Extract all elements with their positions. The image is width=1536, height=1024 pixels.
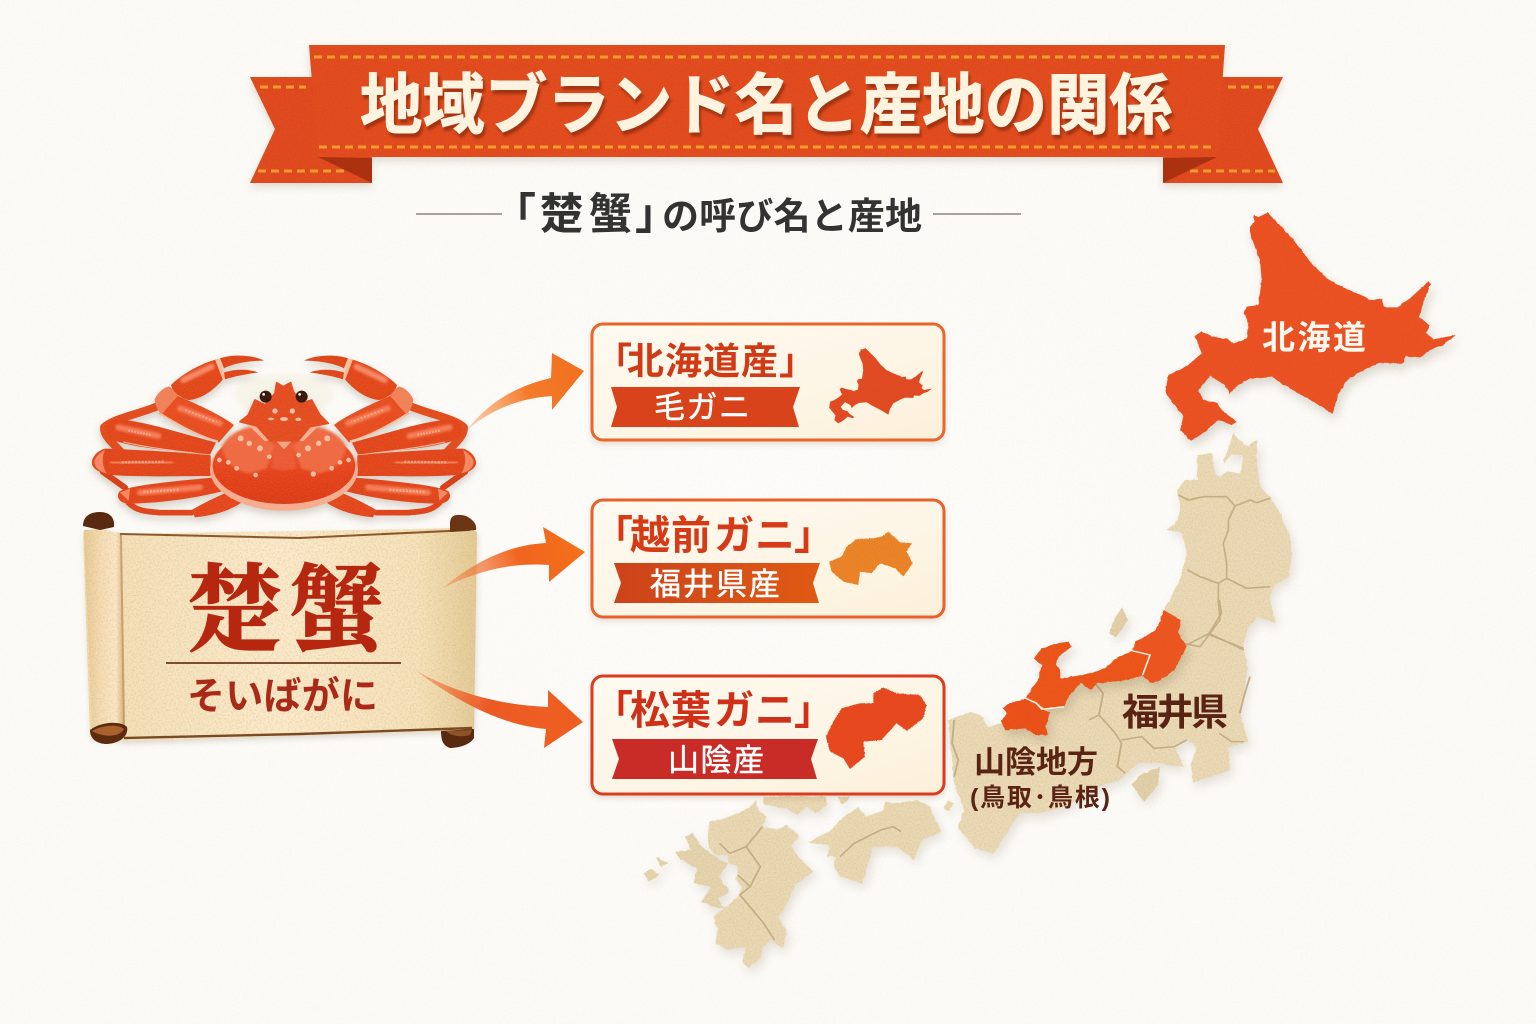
- crab: head and eyes: [240, 383, 328, 441]
- card: Hokkaido: 毛ガニ: [654, 390, 750, 425]
- subtitle: 「楚蟹」: [493, 191, 678, 239]
- crab: right legs: [304, 356, 476, 517]
- subtitle: の呼び名と産地: [662, 196, 922, 237]
- map: Honshu, Shikoku, Kyushu in beige: [644, 434, 1292, 968]
- map label: San'in: (鳥取･鳥根): [970, 784, 1110, 812]
- crab: carapace: [210, 424, 358, 511]
- card: Matsuba: 「松葉ガニ」: [593, 689, 834, 733]
- scroll: [83, 512, 477, 748]
- icon: San'in map: [826, 688, 927, 769]
- scroll reading: そいばがに: [187, 676, 378, 718]
- title text: 地域ブランド名と産地の関係: [360, 68, 1172, 142]
- icon: Hokkaido map: [829, 348, 932, 423]
- scroll paper: [83, 528, 477, 741]
- prefecture boundaries: [720, 495, 1270, 940]
- map of Japan: [644, 213, 1456, 968]
- card: Echizen: [592, 500, 944, 617]
- crab illustration: [92, 356, 476, 517]
- map label: San'in: [970, 745, 1110, 812]
- card: Hokkaido: [592, 324, 944, 440]
- card: Matsuba: [592, 676, 944, 794]
- map label: San'in: 山陰地方: [974, 745, 1098, 780]
- region dividers on the highlighted area: [1026, 651, 1150, 709]
- subtitle: [416, 191, 1021, 239]
- arrow: to Hokkaido card: [467, 353, 584, 430]
- card: Hokkaido: 「北海道産」: [595, 341, 816, 382]
- title banner: [250, 45, 1283, 183]
- arrow: to Echizen card: [443, 527, 585, 588]
- card: Matsuba: 山陰産: [668, 743, 764, 778]
- map: Hokkaido highlighted: [1165, 213, 1456, 441]
- arrow: to Matsuba card: [415, 670, 583, 748]
- icon: Fukui map: [829, 532, 913, 585]
- card: Echizen: 「越前ガニ」: [593, 514, 834, 558]
- map label: Hokkaido: 北海道: [1262, 319, 1366, 356]
- map: Fukui and San'in regions highlighted: [1001, 610, 1187, 735]
- scroll roll caps: [83, 512, 476, 748]
- scroll kanji: zuwai-gani: 楚蟹: [187, 558, 386, 664]
- map label: Fukui: 福井県: [1122, 692, 1228, 733]
- card: Echizen: 福井県産: [650, 567, 780, 602]
- crab: left legs: [92, 356, 264, 517]
